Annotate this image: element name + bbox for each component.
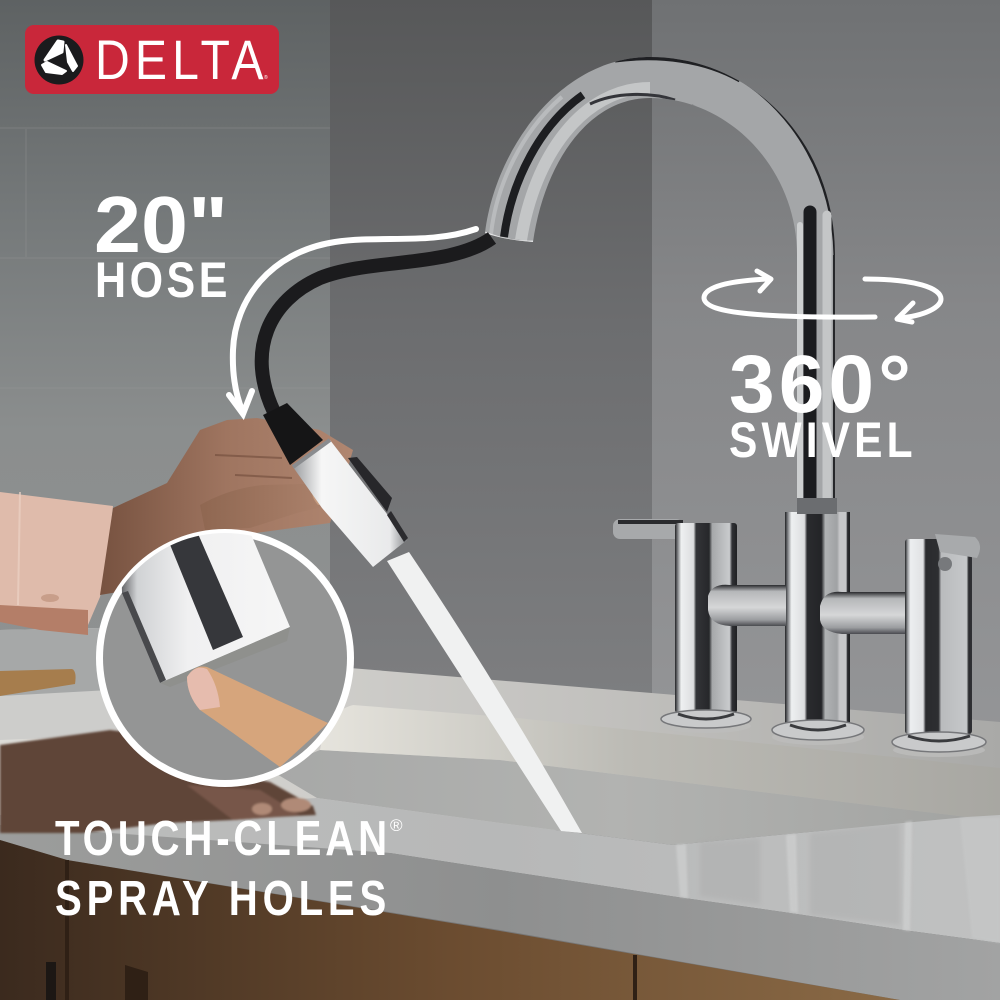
callout: 20 inch hose: 20" bbox=[94, 180, 228, 269]
arrow: 360 swivel bbox=[704, 271, 941, 322]
logo: DELTA: ® bbox=[264, 74, 268, 81]
hose bbox=[262, 238, 492, 412]
right handle bbox=[820, 534, 986, 757]
background: wood cabinet bbox=[0, 840, 900, 1000]
background: kitchen wall bbox=[0, 0, 1000, 770]
logo: DELTA: DELTA bbox=[95, 30, 264, 92]
callout: touch-clean spray holes: ® bbox=[390, 816, 403, 835]
callout: touch-clean spray holes: TOUCH-CLEAN bbox=[55, 811, 387, 866]
upper hand bbox=[100, 418, 353, 595]
callout: 20 inch hose bbox=[94, 180, 228, 308]
callout: 360 swivel: 360° bbox=[729, 339, 915, 430]
faucet spout bbox=[480, 50, 840, 510]
cutting board bbox=[0, 669, 76, 696]
callout: 360 swivel: SWIVEL bbox=[729, 412, 913, 468]
inset lens: touch-clean detail bbox=[96, 520, 354, 787]
background: countertop and sink bbox=[0, 628, 1000, 1000]
center body bbox=[772, 498, 864, 745]
callout: 20 inch hose: HOSE bbox=[95, 252, 227, 308]
spray head bbox=[263, 403, 408, 567]
logo: DELTA bbox=[25, 25, 279, 94]
callout: touch-clean spray holes bbox=[55, 811, 403, 926]
arrow: hose length bbox=[229, 229, 476, 414]
left handle bbox=[613, 519, 786, 733]
faucet bbox=[480, 50, 986, 757]
arm and cuff bbox=[0, 492, 113, 635]
callout: touch-clean spray holes: SPRAY HOLES bbox=[55, 871, 386, 926]
water stream bbox=[387, 552, 582, 833]
lower hand bbox=[0, 730, 316, 833]
icon: delta triangle bbox=[34, 36, 84, 84]
